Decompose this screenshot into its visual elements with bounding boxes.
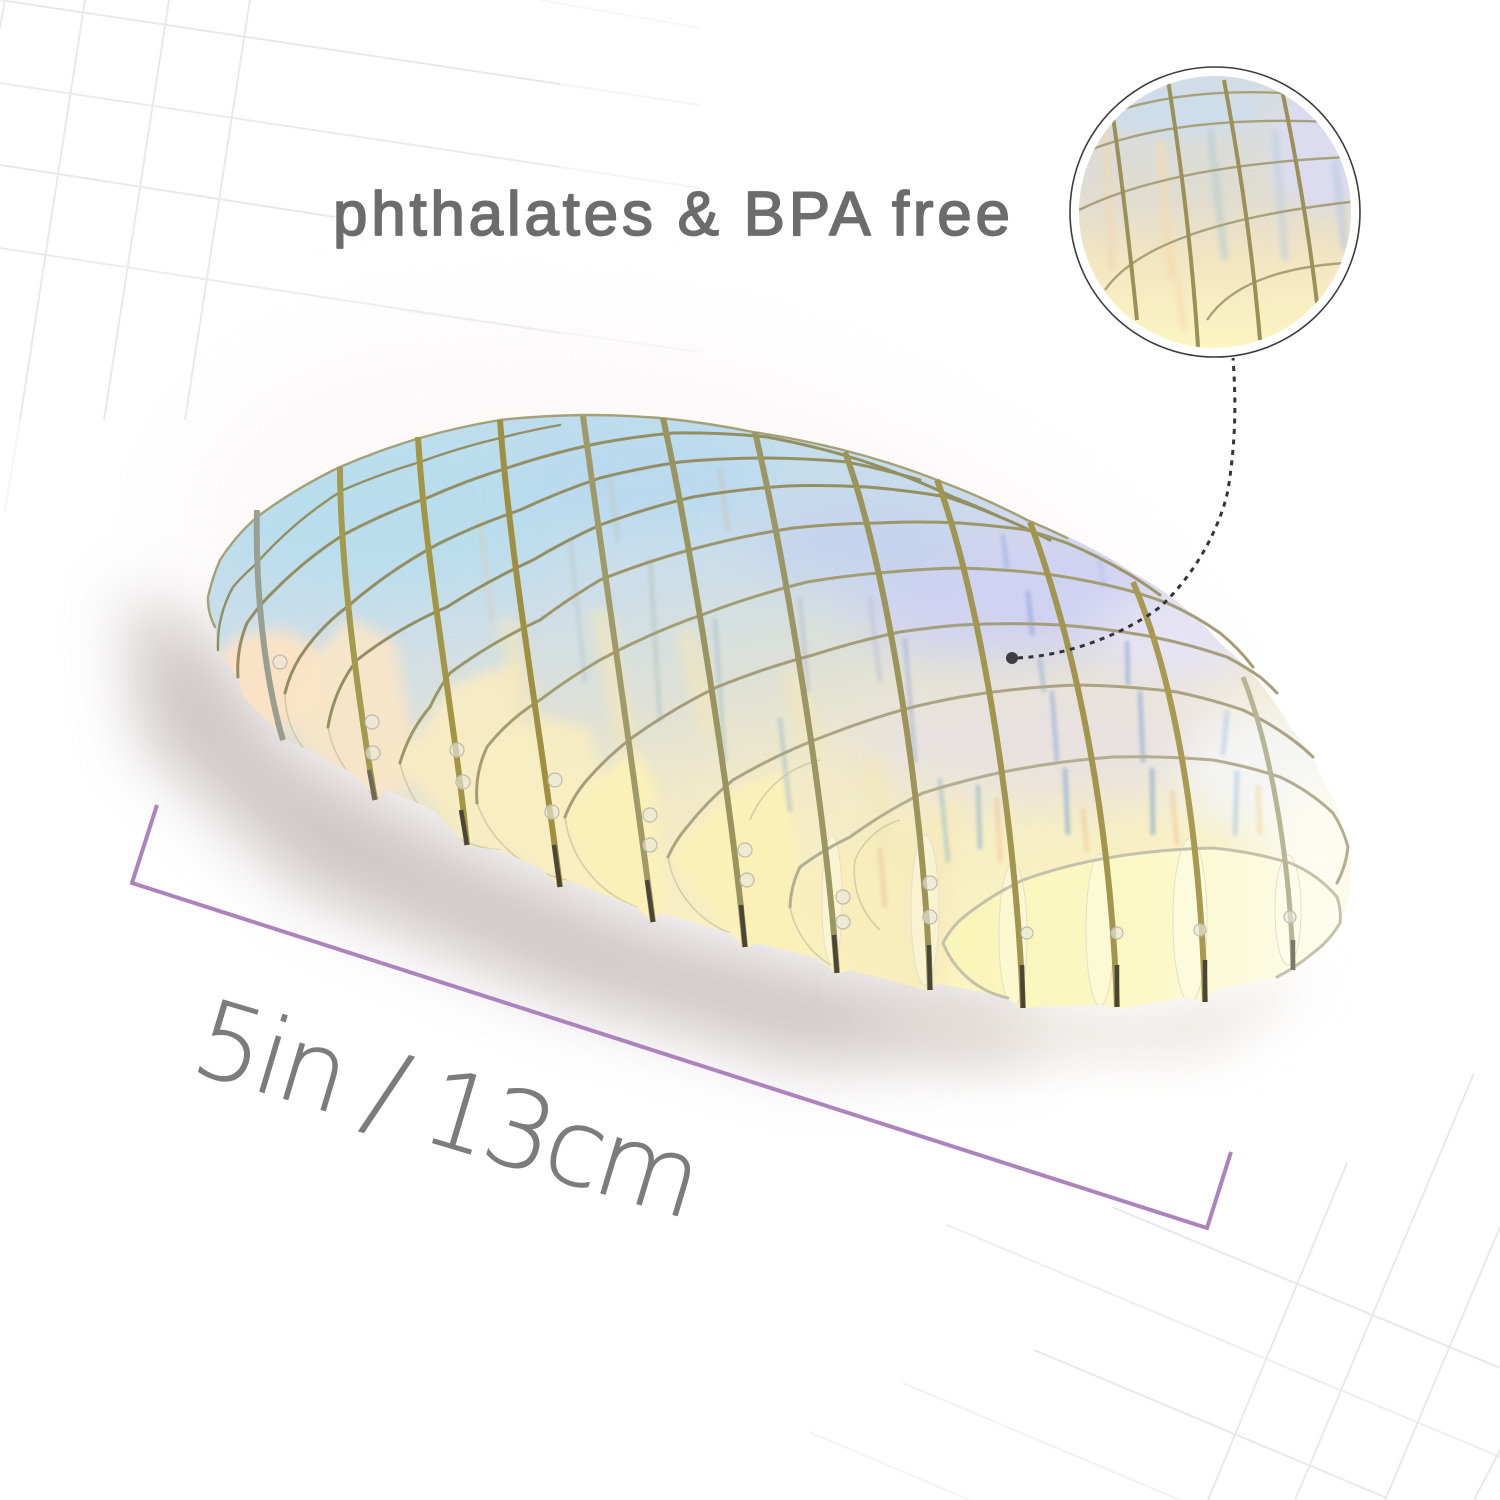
inset spines: [1110, 80, 1317, 347]
pale lenses around front spines: [822, 835, 1301, 1007]
cream strips beside spines: [495, 606, 886, 812]
dimension bracket: [132, 805, 1231, 1228]
lobe outlines: [282, 694, 900, 966]
vertical gold spines: [257, 416, 1293, 1008]
horizontal rings: [208, 415, 1348, 998]
watercolor streaks: [480, 470, 1260, 905]
front face of lowest ring: [956, 850, 1338, 1009]
product: iridescent acrylic ellipsoid: [208, 415, 1370, 1020]
front lobes: warm yellow wedges: [285, 617, 960, 1000]
background grid: top left: [0, 0, 700, 510]
inset picture: [1079, 76, 1351, 348]
heading: phthalates & BPA free: phthalates & BPA free: [333, 180, 1010, 249]
connector tabs on spines: [273, 655, 1296, 939]
iridescent colour washes: [210, 430, 1370, 1020]
product body: [208, 415, 1351, 1009]
background grid: bottom right: [809, 1073, 1500, 1500]
inset: magnified material circle: [1070, 67, 1370, 360]
inset outer ring: [1070, 67, 1360, 357]
dimension label: 5in / 13cm: [181, 976, 716, 1243]
spine dark lower tips: [277, 722, 1293, 1008]
inset rings: [1079, 92, 1350, 320]
callout anchor dot: [1006, 652, 1018, 664]
soft pink glow behind product: [102, 214, 1298, 1066]
callout leader: dotted curve from product to inset: [1018, 358, 1235, 658]
cast shadow of product: [125, 590, 1320, 1065]
